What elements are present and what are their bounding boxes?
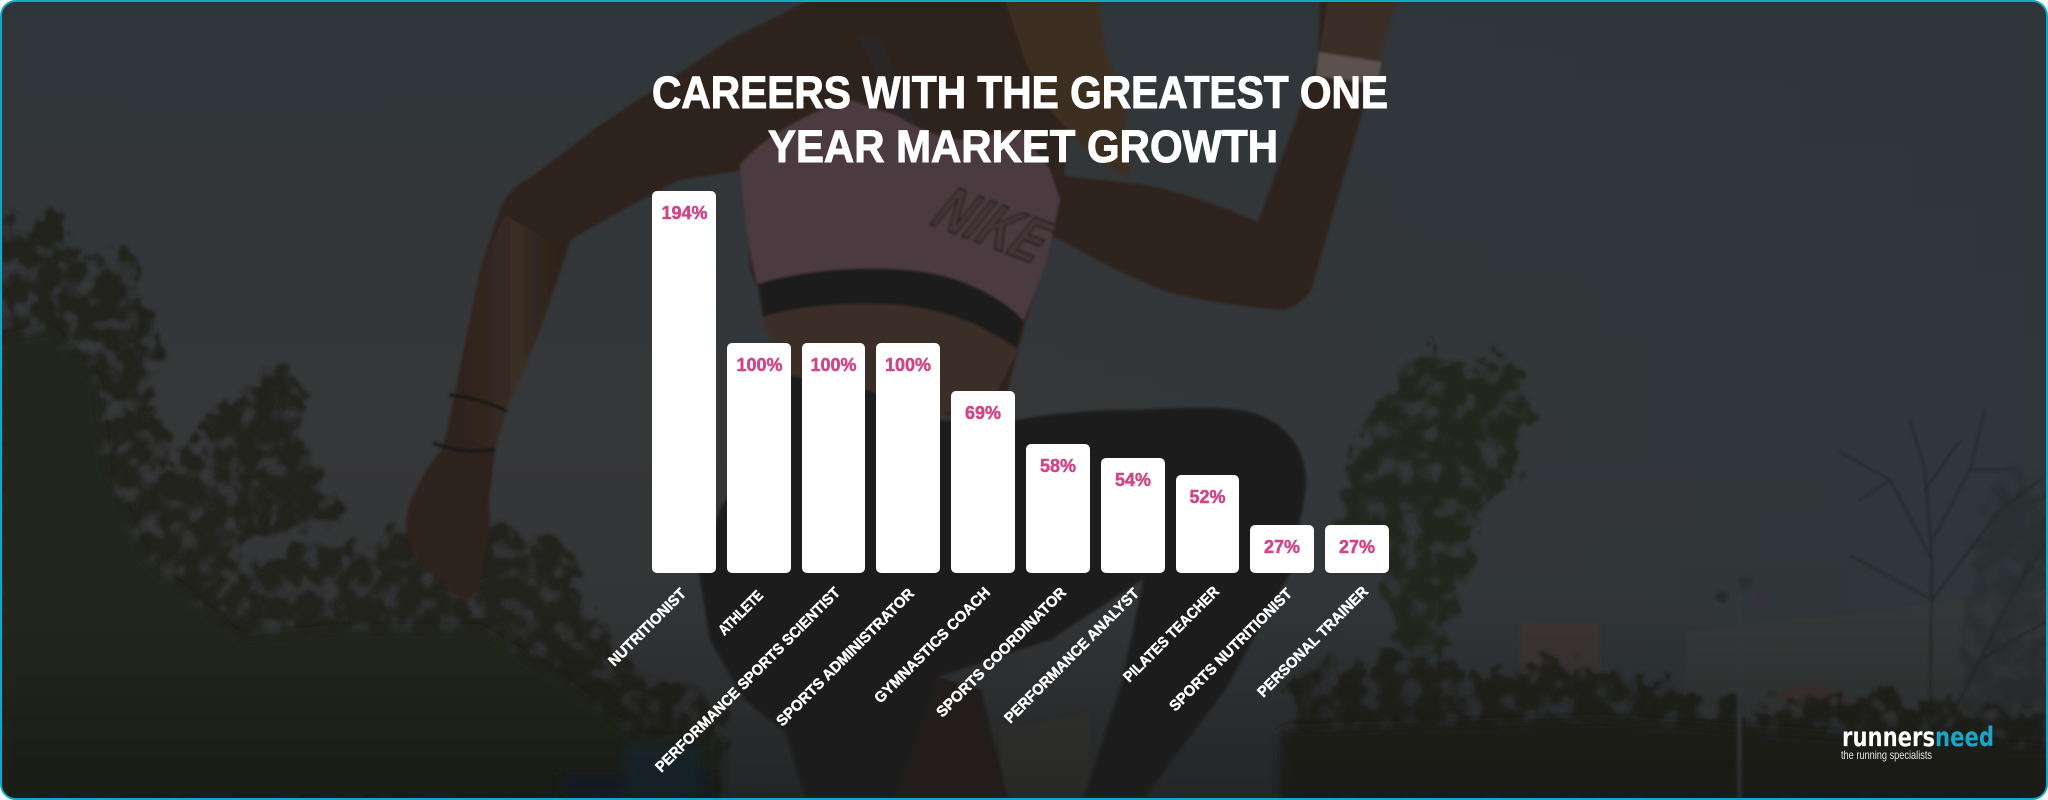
- trees: left cluster: [0, 205, 720, 800]
- bar: gymnastics coach: [951, 391, 1015, 573]
- runner: hair: [1005, 0, 1130, 180]
- bar: nutritionist: 194%: [661, 203, 708, 223]
- bar: gymnastics coach: 69%: [965, 403, 1001, 423]
- runner: midriff: [762, 303, 1018, 420]
- runner: leggings: [699, 375, 1306, 798]
- lamp post: [1716, 576, 1766, 800]
- bar: nutritionist: [652, 191, 716, 573]
- tree: crown right of the bars: [1340, 345, 1540, 680]
- runner: watch strap: [1316, 52, 1382, 84]
- building: dome: [1770, 685, 1850, 700]
- bar: performance sports scientist: [802, 343, 865, 573]
- logo: runnersneed: runnersneed: [1842, 722, 1994, 753]
- runner: pink crop top: [740, 100, 1060, 322]
- rotated career labels: ATHLETE: [715, 587, 767, 639]
- title: CAREERS WITH THE GREATEST ONE: [652, 67, 1388, 118]
- bar: sports nutritionist: 27%: [1264, 537, 1300, 557]
- runner: lit forearm: [447, 215, 565, 449]
- runner silhouette in the photo: [406, 0, 1398, 798]
- title: [652, 67, 1388, 172]
- bar: performance analyst: 54%: [1115, 470, 1151, 490]
- trees: low tree line on the right: [1290, 655, 2048, 800]
- bar: sports administrator: [876, 343, 940, 573]
- bar: pilates teacher: 52%: [1189, 487, 1226, 507]
- rotated career labels: PERSONAL TRAINER: [1254, 583, 1372, 701]
- tree: foliage right of the bare tree: [1960, 470, 2048, 720]
- rotated career labels: PILATES TEACHER: [1120, 583, 1223, 686]
- bar: performance analyst: [1101, 458, 1165, 573]
- title: YEAR MARKET GROWTH: [768, 121, 1278, 172]
- blue court at the bottom left: [560, 772, 710, 798]
- bar: sports coordinator: 58%: [1040, 456, 1076, 476]
- fence and low building behind the legs: [1000, 712, 1090, 800]
- bar: sports nutritionist: [1250, 525, 1314, 573]
- runner: wristbands: [433, 395, 507, 451]
- trees: solid core of left cluster: [0, 330, 720, 800]
- runner: rear calf: [894, 677, 1008, 798]
- trees: solid core of right tree line: [1280, 720, 2048, 800]
- bar: athlete: 100%: [736, 355, 783, 375]
- building: long roof on the right: [1686, 590, 2048, 720]
- rotated career labels: NUTRITIONIST: [605, 585, 690, 670]
- ground shading: [0, 600, 2048, 800]
- runner: straps: [858, 36, 918, 130]
- runner: black hem band: [758, 268, 1023, 347]
- rotated career labels: SPORTS NUTRITIONIST: [1166, 585, 1296, 715]
- rotated career labels: SPORTS COORDINATOR: [933, 584, 1070, 721]
- logo: runnersneed: the running specialists: [1841, 748, 1932, 762]
- bar: personal trainer: [1325, 525, 1389, 573]
- rotated career labels: PERFORMANCE SPORTS SCIENTIST: [652, 584, 844, 776]
- bar: personal trainer: 27%: [1339, 537, 1375, 557]
- tree: bare tree on the right: [1840, 410, 2048, 720]
- bar chart: [652, 191, 1389, 573]
- rotated career labels: PERFORMANCE ANALYST: [1001, 585, 1143, 727]
- building: distant tower: [1520, 622, 1600, 684]
- bar: sports administrator: 100%: [885, 355, 931, 375]
- bar: athlete: [727, 343, 791, 573]
- rotated career labels: SPORTS ADMINISTRATOR: [773, 585, 918, 730]
- runner: logo on the crop top: NIKE: [918, 176, 1070, 274]
- rotated career labels: [605, 583, 1372, 776]
- runner: raised hand skin: [1318, 0, 1398, 62]
- bar: pilates teacher: [1176, 475, 1239, 573]
- bar: sports coordinator: [1026, 444, 1090, 573]
- runner: arm and torso skin: [406, 0, 1398, 600]
- rotated career labels: GYMNASTICS COACH: [871, 584, 994, 707]
- bar: performance sports scientist: 100%: [810, 355, 857, 375]
